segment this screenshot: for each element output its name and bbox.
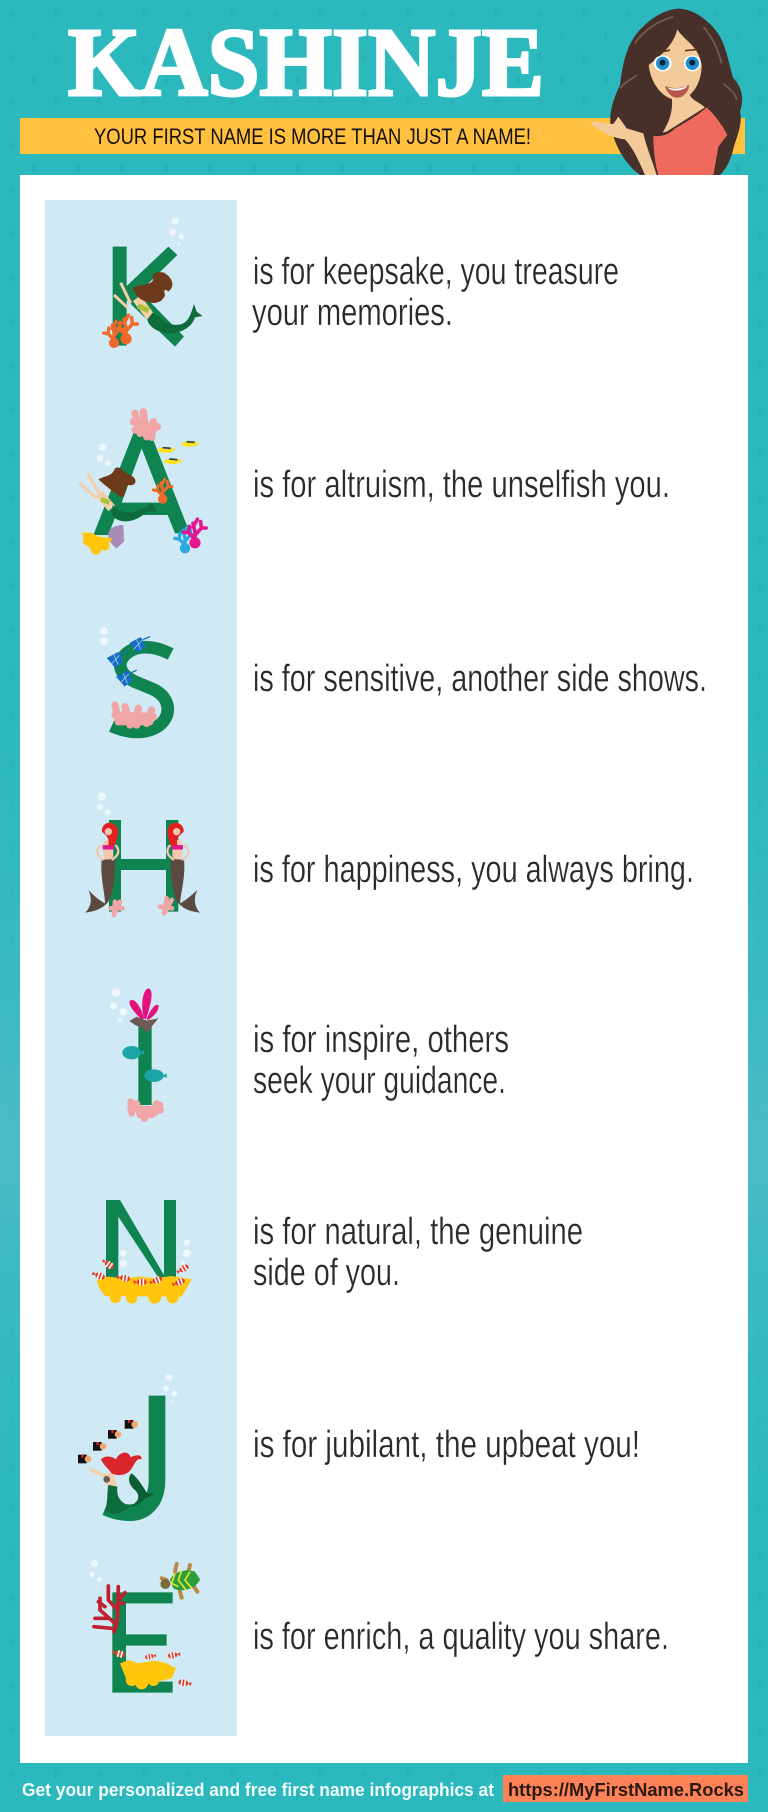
text: N: side of you. [253,1252,400,1294]
letter K illustration [104,217,203,348]
text: I [253,1019,509,1102]
character: woman presenting [590,9,742,175]
letter S illustration [100,623,171,732]
text: N: is for natural, the genuine [253,1211,583,1253]
letter column [45,200,237,1736]
letter N illustration [91,1200,192,1304]
link text: https://MyFirstName.Rocks [508,1780,744,1800]
letter E illustration [89,1560,200,1693]
subtitle banner [20,118,745,154]
letter I illustration [110,988,167,1118]
text: J: is for jubilant, the upbeat you! [253,1424,640,1466]
title: KASHINJE [68,9,544,116]
letter A illustration [79,412,206,555]
text: N [253,1211,583,1294]
text: K: your memories. [252,292,453,334]
letter J illustration [78,1374,177,1514]
text: K: is for keepsake, you treasure [253,251,619,293]
text: I: seek your guidance. [253,1060,506,1102]
text: I: is for inspire, others [253,1019,509,1061]
text: K [252,251,619,334]
footer call to action: Get your personalized and free first name infographics at [22,1780,494,1800]
footer link button [503,1775,748,1802]
banner text: YOUR FIRST NAME IS MORE THAN JUST A NAME! [94,124,531,149]
letter H illustration [85,793,200,915]
